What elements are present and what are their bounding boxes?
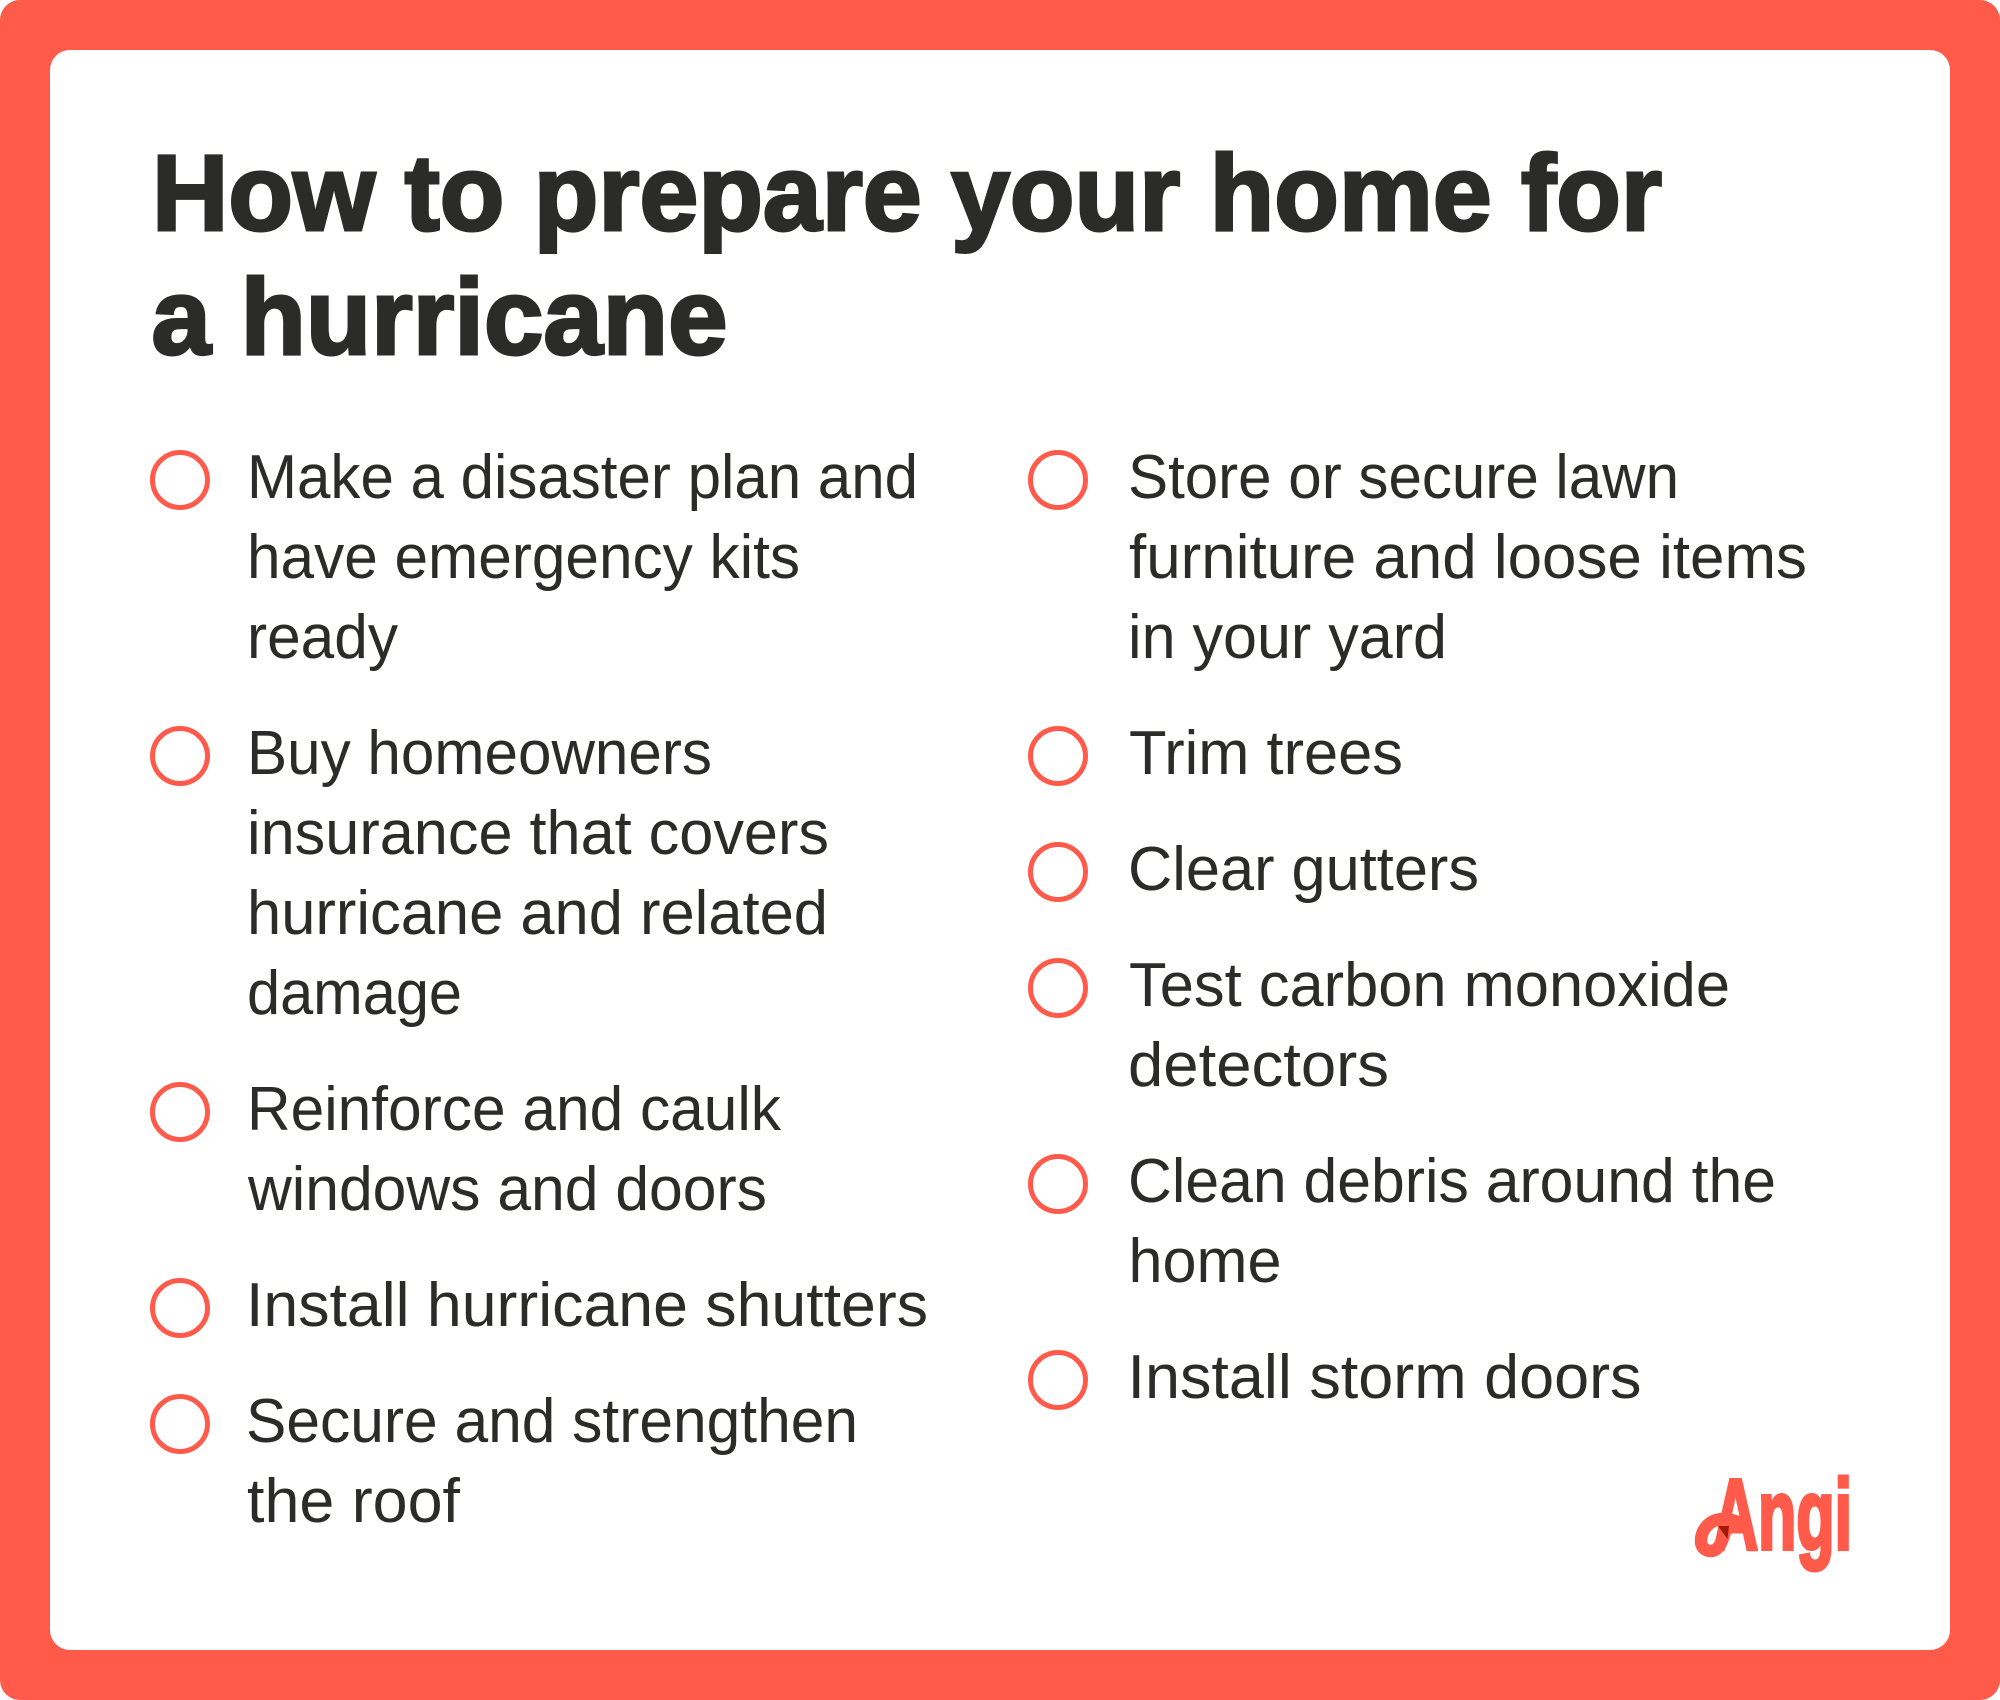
panel: left checklist column	[152, 443, 928, 1536]
item: clean debris	[1030, 1147, 1776, 1296]
logo: Angi: Angi	[1713, 1459, 1852, 1571]
item: lawn furniture	[1030, 443, 1807, 672]
item: homeowners insurance: hurricane and related	[247, 879, 828, 948]
item: disaster plan: ready	[247, 603, 398, 672]
item: storm doors: Install storm doors	[1128, 1343, 1642, 1412]
item: homeowners insurance: Buy homeowners	[247, 719, 712, 788]
item: roof: Secure and strengthen	[246, 1387, 858, 1456]
item: carbon monoxide detectors: Test carbon monoxide	[1129, 951, 1730, 1020]
title: a hurricane	[152, 256, 728, 377]
item: windows and doors	[152, 1075, 782, 1224]
title	[152, 132, 1662, 377]
item: hurricane shutters: Install hurricane shutters	[246, 1271, 928, 1340]
item: windows and doors: windows and doors	[247, 1155, 767, 1224]
item: disaster plan	[152, 443, 918, 672]
item: lawn furniture: furniture and loose items	[1129, 523, 1807, 592]
item: roof	[152, 1387, 858, 1536]
item: clear gutters: Clear gutters	[1128, 835, 1479, 904]
logo: Angi	[1701, 1459, 1852, 1571]
panel: right checklist column	[1030, 443, 1807, 1412]
item: disaster plan: have emergency kits	[247, 523, 800, 592]
item: roof: the roof	[247, 1467, 461, 1536]
item: trim trees: Trim trees	[1129, 719, 1403, 788]
item: disaster plan: Make a disaster plan and	[247, 443, 918, 512]
item: clean debris: Clean debris around the	[1128, 1147, 1776, 1216]
item: carbon monoxide detectors: detectors	[1128, 1031, 1389, 1100]
title: How to prepare your home for	[152, 132, 1662, 253]
item: homeowners insurance: damage	[247, 959, 462, 1028]
item: homeowners insurance	[152, 719, 829, 1028]
item: carbon monoxide detectors	[1030, 951, 1730, 1100]
item: lawn furniture: Store or secure lawn	[1128, 443, 1679, 512]
item: windows and doors: Reinforce and caulk	[247, 1075, 782, 1144]
item: clean debris: home	[1128, 1227, 1282, 1296]
item: homeowners insurance: insurance that covers	[247, 799, 829, 868]
item: lawn furniture: in your yard	[1128, 603, 1447, 672]
